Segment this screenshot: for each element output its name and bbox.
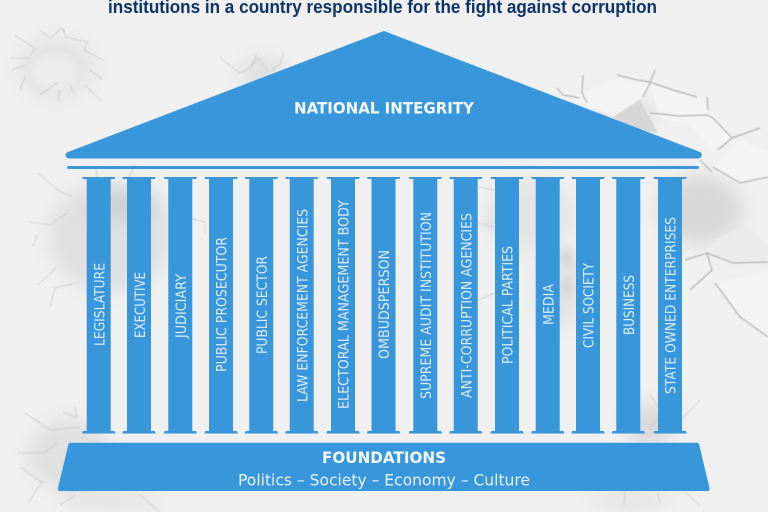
pillar: executive: EXECUTIVE bbox=[133, 272, 149, 338]
pillar: ombudsperson: OMBUDSPERSON bbox=[377, 250, 393, 359]
pillar: law enforcement agencies: LAW ENFORCEMENT AGENCIES bbox=[295, 209, 311, 402]
pillar: business: BUSINESS bbox=[622, 275, 638, 335]
temple roof bbox=[66, 31, 702, 158]
pillar: civil society bbox=[571, 177, 605, 434]
pillar: legislature: LEGISLATURE bbox=[92, 263, 108, 346]
pillar: ombudsperson bbox=[367, 177, 400, 434]
entablature beam bbox=[67, 166, 699, 169]
pillar: executive bbox=[122, 177, 156, 434]
pillar: business bbox=[612, 177, 645, 434]
foundations subtitle: Politics – Society – Economy – Culture bbox=[238, 470, 530, 489]
pillar: anti-corruption agencies: ANTI-CORRUPTION AGENCIES bbox=[459, 213, 475, 398]
pillar: judiciary: JUDICIARY bbox=[174, 274, 190, 339]
pillar: state owned enterprises: STATE OWNED ENTERPRISES bbox=[664, 217, 680, 394]
pillar: political parties: POLITICAL PARTIES bbox=[501, 246, 517, 364]
crack hole interior bbox=[31, 54, 79, 90]
pillar: supreme audit institution: SUPREME AUDIT INSTITUTION bbox=[419, 212, 435, 399]
pillar: judiciary bbox=[164, 177, 197, 434]
pillar: public prosecutor: PUBLIC PROSECUTOR bbox=[215, 237, 231, 372]
pillar: public prosecutor bbox=[204, 177, 238, 434]
heading: foundations: FOUNDATIONS bbox=[322, 448, 446, 467]
pillar: supreme audit institution bbox=[409, 177, 442, 434]
foundation base bbox=[58, 443, 710, 491]
pillar: anti-corruption agencies bbox=[449, 177, 482, 434]
pillar: legislature bbox=[82, 177, 116, 434]
pillars bbox=[82, 177, 687, 434]
pillar: public sector bbox=[245, 177, 278, 434]
heading: national integrity: NATIONAL INTEGRITY bbox=[294, 98, 474, 118]
pillar: state owned enterprises bbox=[653, 177, 687, 434]
pillar: political parties bbox=[490, 177, 524, 434]
pillar: civil society: CIVIL SOCIETY bbox=[582, 263, 598, 348]
pillar: media bbox=[531, 177, 564, 434]
pillar: law enforcement agencies bbox=[285, 177, 318, 434]
pillar: public sector: PUBLIC SECTOR bbox=[255, 256, 271, 354]
pillar: electoral management body bbox=[326, 177, 360, 434]
pillar: media: MEDIA bbox=[541, 284, 557, 325]
pillar: electoral management body: ELECTORAL MANAGEMENT BODY bbox=[337, 200, 353, 409]
